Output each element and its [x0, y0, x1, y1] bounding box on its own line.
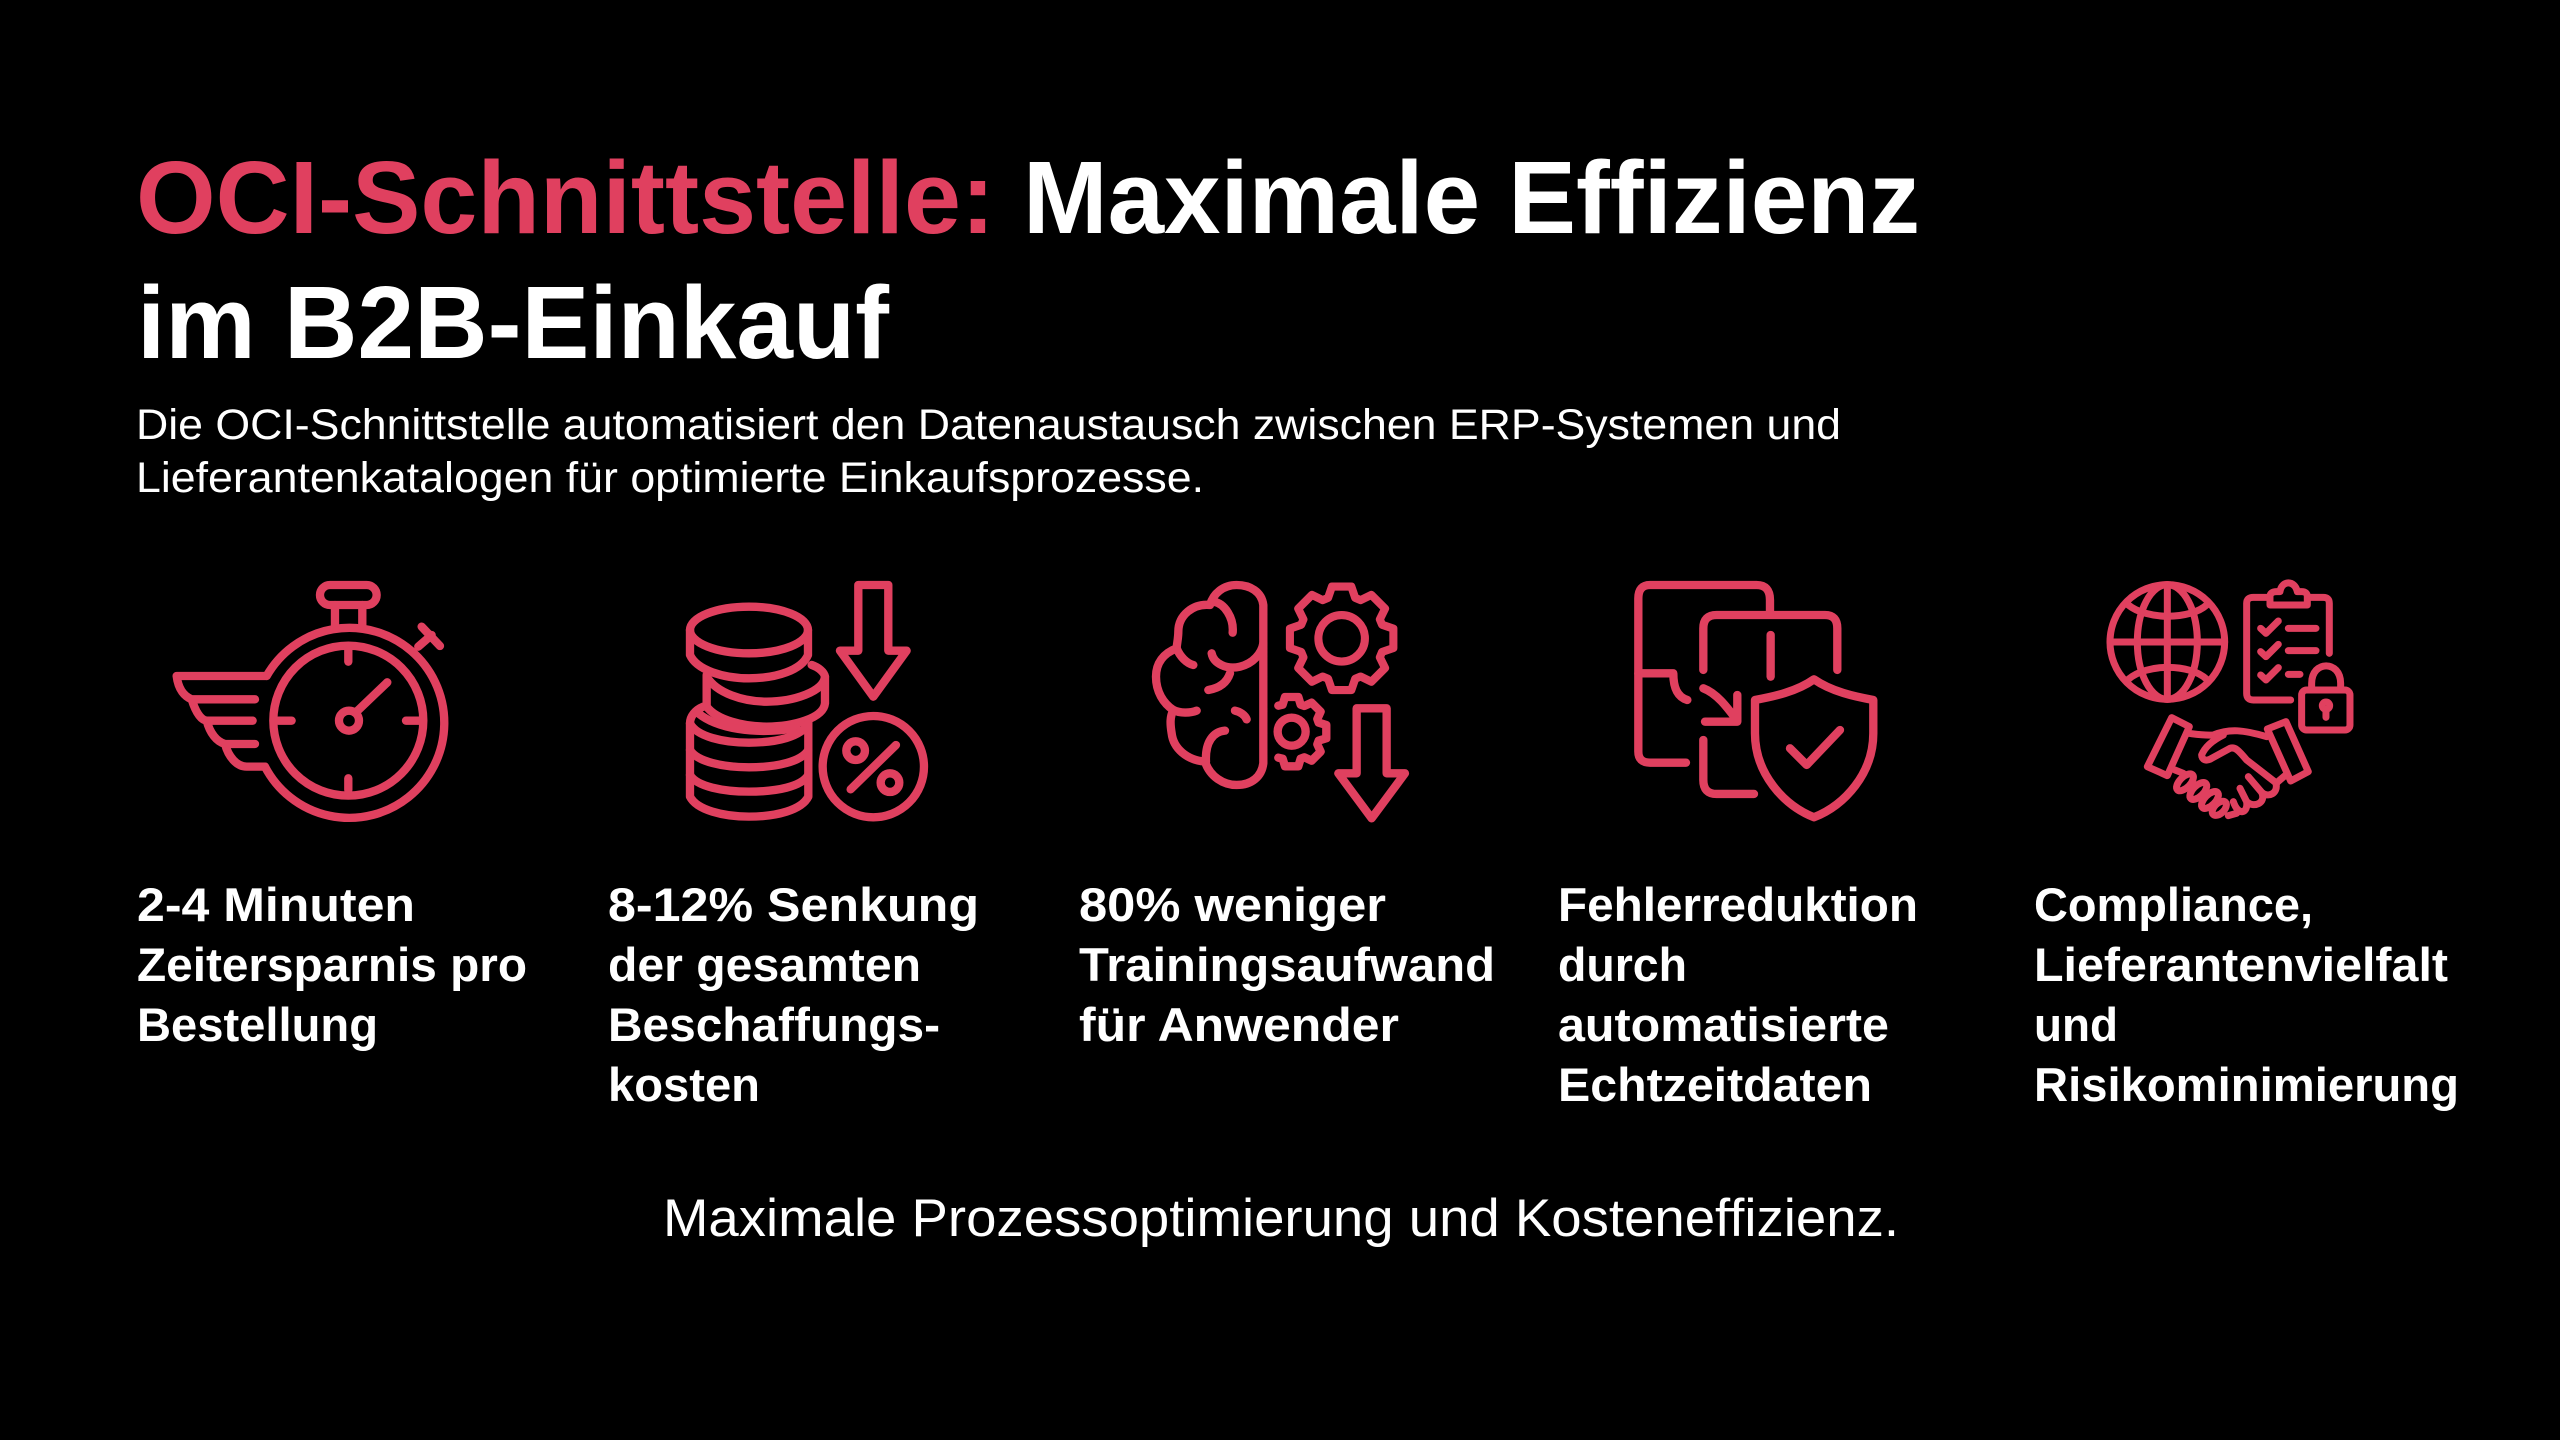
label: 8-12% Senkung: der gesamten — [608, 938, 921, 991]
title: OCI-Schnittstelle: — [136, 140, 995, 255]
icon: globe, clipboard with lock and handshake — [2110, 583, 2350, 818]
closing statement: Maximale Prozessoptimierung und Kosteneffizienz. — [663, 1189, 1899, 1248]
label: 8-12% Senkung: kosten — [608, 1058, 760, 1111]
label: 2-4 Minuten: Zeitersparnis pro — [137, 938, 527, 991]
panel: Trainingsaufwand — [1079, 585, 1495, 1051]
label: Compliance — [2034, 878, 2459, 1111]
label: 2-4 Minuten: 2-4 Minuten — [137, 878, 415, 931]
label: Compliance: Compliance, — [2034, 878, 2313, 931]
subtitle: Die OCI-Schnittstelle automatisiert den Datenaustausch zwischen ERP-Systemen und — [136, 401, 1841, 449]
label: Fehlerreduktion: durch — [1558, 938, 1687, 991]
label: Compliance: und — [2034, 998, 2118, 1051]
label: 80% weniger: Trainingsaufwand — [1079, 938, 1495, 991]
label: 2-4 Minuten — [137, 878, 527, 1051]
icon: coins with percent and down arrow — [690, 585, 924, 817]
label: Fehlerreduktion: Echtzeitdaten — [1558, 1058, 1872, 1111]
panel: Zeitersparnis — [137, 585, 527, 1051]
label: Fehlerreduktion — [1558, 878, 1918, 1111]
label: 80% weniger: 80% weniger — [1079, 878, 1386, 931]
label: 8-12% Senkung — [608, 878, 979, 1111]
label: 8-12% Senkung: 8-12% Senkung — [608, 878, 979, 931]
icon: documents with shield — [1638, 585, 1873, 817]
label: 2-4 Minuten: Bestellung — [137, 998, 378, 1051]
panel: Compliance — [2034, 583, 2459, 1111]
label: Compliance: Risikominimierung — [2034, 1058, 2459, 1111]
label: Fehlerreduktion: automatisierte — [1558, 998, 1889, 1051]
title: im B2B-Einkauf — [137, 265, 890, 380]
panel: Fehlerreduktion — [1558, 585, 1918, 1111]
label: Compliance: Lieferantenvielfalt — [2034, 938, 2448, 991]
icon: brain, gears and down arrow — [1156, 585, 1405, 818]
label: 8-12% Senkung: Beschaffungs- — [608, 998, 940, 1051]
label: Fehlerreduktion: Fehlerreduktion — [1558, 878, 1918, 931]
title — [136, 140, 1920, 380]
panel: Kostensenkung — [608, 585, 979, 1111]
label: 80% weniger — [1079, 878, 1495, 1051]
subtitle — [136, 401, 1841, 502]
subtitle: Lieferantenkatalogen für optimierte Einkaufsprozesse. — [136, 454, 1204, 502]
icon: winged stopwatch — [177, 585, 444, 818]
title: Maximale Effizienz — [1023, 140, 1920, 255]
label: 80% weniger: für Anwender — [1079, 998, 1399, 1051]
